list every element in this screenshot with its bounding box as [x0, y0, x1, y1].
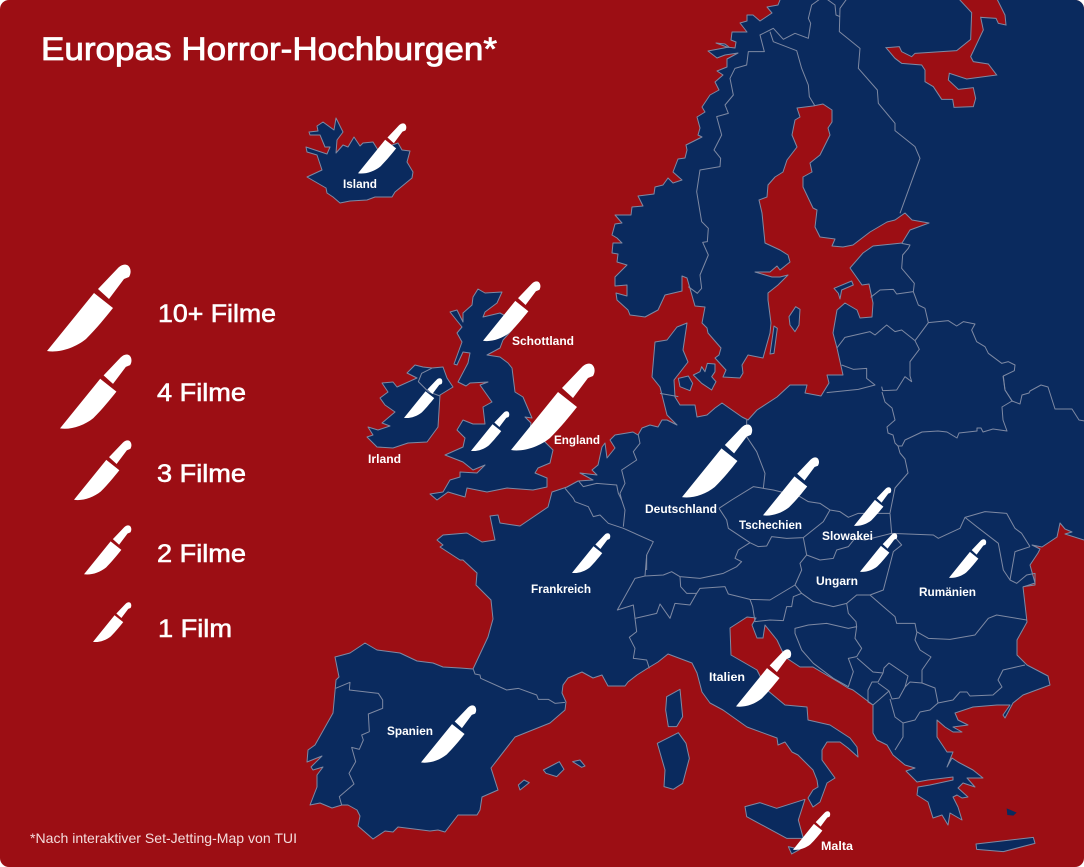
legend item: 3 Filme: 3 Filme — [157, 460, 246, 488]
Iceland — [306, 118, 413, 203]
Irland: Irland — [368, 452, 401, 466]
Italien: Italien — [709, 670, 745, 684]
legend item: 10+ Filme: 10+ Filme — [158, 300, 276, 328]
Tschechien — [739, 457, 819, 532]
Rumänien — [919, 539, 986, 599]
Malta — [793, 811, 853, 853]
England — [511, 364, 600, 450]
Slowakei — [822, 487, 891, 543]
knife markers and country labels — [343, 123, 986, 853]
Wales knife — [471, 411, 509, 451]
Mediterranean and Baltic islands — [518, 281, 1035, 854]
Deutschland — [645, 424, 752, 516]
legend item: 3 Filme — [74, 440, 246, 500]
Slowakei: Slowakei — [822, 529, 873, 543]
country borders — [336, 0, 1084, 805]
England: England — [554, 433, 600, 447]
legend item: 2 Filme — [84, 525, 246, 574]
map of Europe — [306, 0, 1084, 854]
Tschechien: Tschechien — [739, 518, 802, 532]
Frankreich — [531, 533, 610, 596]
Great Britain — [430, 289, 553, 500]
mainland Europe — [307, 0, 1084, 839]
Frankreich: Frankreich — [531, 582, 591, 596]
legend item: 4 Filme: 4 Filme — [157, 379, 246, 407]
Ungarn: Ungarn — [816, 574, 858, 588]
Rumänien: Rumänien — [919, 585, 976, 599]
Deutschland: Deutschland — [645, 502, 717, 516]
Ungarn — [816, 533, 897, 588]
Ireland — [367, 365, 453, 448]
footnote: *Nach interaktiver Set-Jetting-Map von TUI — [30, 830, 297, 846]
Malta: Malta — [821, 839, 853, 853]
White Sea — [886, 0, 1006, 107]
legend item: 10+ Filme — [47, 265, 276, 351]
title: Europas Horror-Hochburgen* — [41, 31, 497, 67]
Island — [343, 123, 406, 191]
Irland — [368, 378, 442, 466]
legend item: 2 Filme: 2 Filme — [157, 540, 246, 568]
Schottland: Schottland — [512, 334, 574, 348]
legend item: 1 Film: 1 Film — [158, 615, 232, 643]
Italien — [709, 649, 791, 707]
Island: Island — [343, 177, 377, 191]
legend item: 1 Film — [93, 602, 232, 643]
legend — [47, 265, 276, 643]
legend item: 4 Filme — [60, 355, 246, 429]
Schottland — [483, 281, 574, 348]
Spanien — [387, 705, 476, 763]
Spanien: Spanien — [387, 724, 433, 738]
